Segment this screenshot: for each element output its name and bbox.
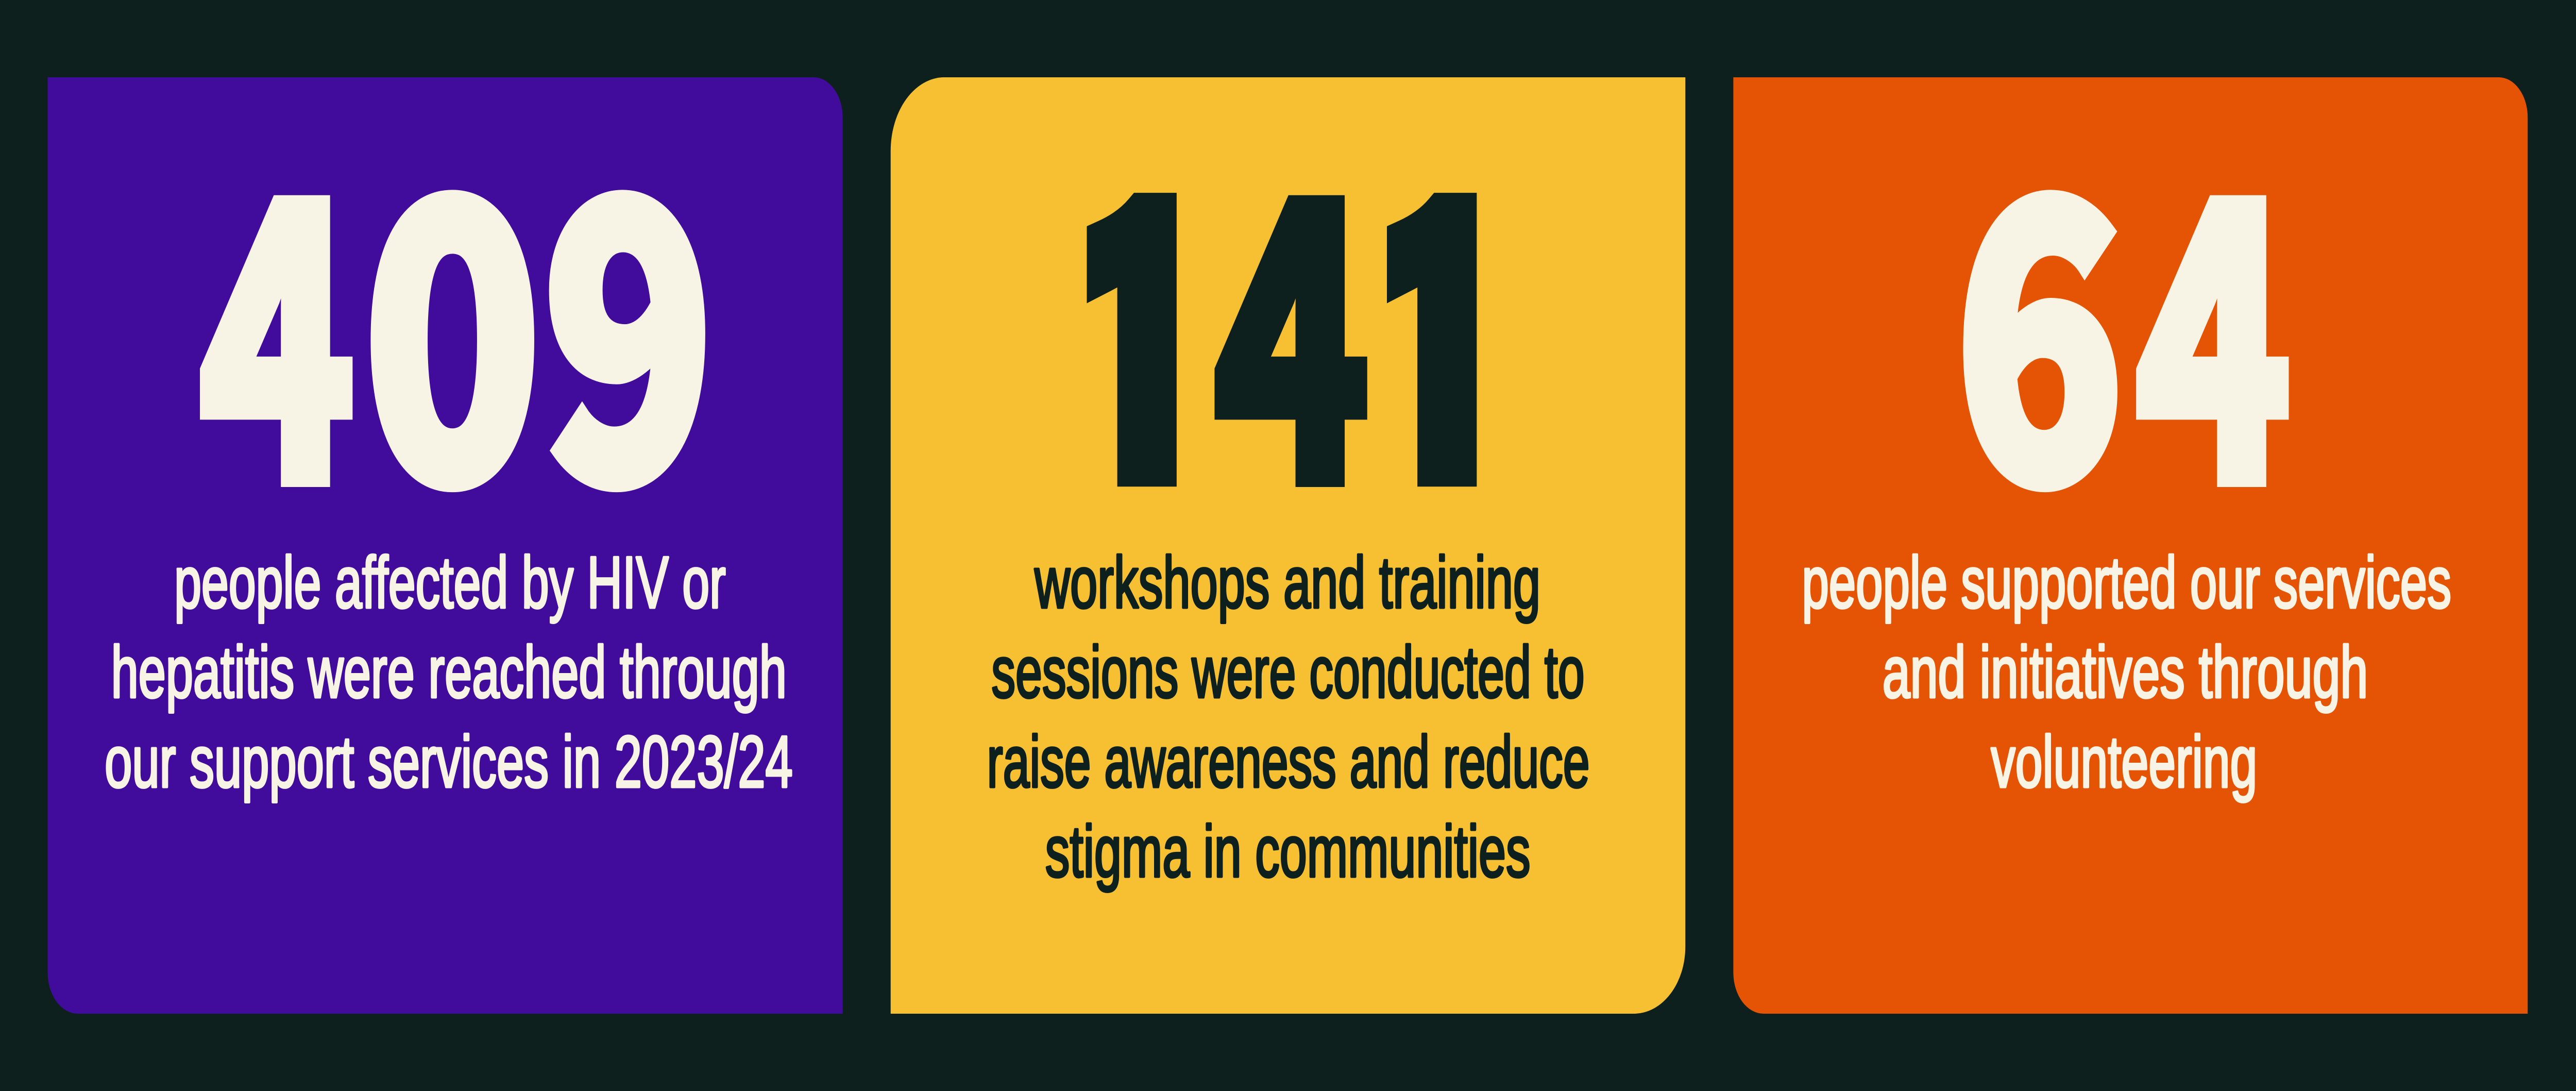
big number: 64: 6	[1957, 40, 2122, 585]
description: workshops: raise awareness and reduce	[987, 721, 1590, 803]
description: volunteers: and initiatives through	[1883, 632, 2368, 713]
big number: 64	[1957, 40, 2289, 585]
description: people reached	[105, 542, 793, 803]
description: volunteers	[1802, 542, 2451, 803]
panel: workshops	[891, 40, 1685, 1014]
panel background: purple	[47, 77, 843, 1014]
big number: 141	[1071, 40, 1516, 585]
big number: 409	[201, 40, 712, 585]
big number: 409: 4	[201, 40, 353, 585]
big number: 141: 1	[1071, 169, 1215, 526]
description: volunteers: volunteering	[1991, 721, 2257, 803]
description: volunteers: people supported our services	[1802, 542, 2451, 624]
description: workshops	[987, 542, 1590, 893]
description: workshops: stigma in communities	[1045, 811, 1531, 893]
panel background: orange	[1733, 77, 2528, 1014]
panel: volunteers	[1733, 40, 2528, 1014]
big number: 409: 0	[366, 40, 539, 585]
big number: 141: 1	[1370, 169, 1516, 526]
big number: 409: 9	[546, 41, 712, 585]
big number: 141: 4	[1216, 40, 1367, 585]
description: people reached: our support services in 2023/24	[105, 721, 793, 803]
description: workshops: workshops and training	[1034, 542, 1540, 624]
description: people reached: people affected by HIV or	[174, 542, 726, 624]
description: workshops: sessions were conducted to	[991, 632, 1585, 713]
description: people reached: hepatitis were reached through	[111, 632, 787, 713]
big number: 64: 4	[2138, 40, 2289, 585]
panel: people reached	[47, 40, 843, 1014]
panel background: yellow	[891, 77, 1685, 1014]
